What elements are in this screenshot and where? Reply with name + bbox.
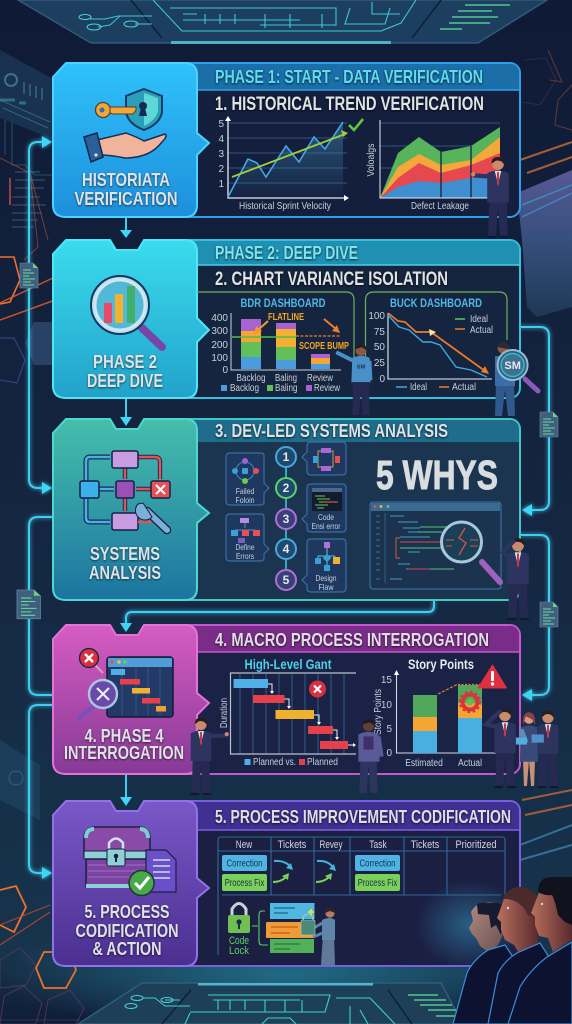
line chart: historical sprint velocity: 4 <box>218 134 224 145</box>
kanban table <box>218 837 505 955</box>
kanban table: Tickets <box>278 839 307 851</box>
icon: locked chest with document <box>84 827 176 896</box>
chart: buck dashboard: 100 <box>368 311 385 322</box>
panel: phase 2 <box>53 240 538 416</box>
kanban table: Prioritized <box>456 839 496 851</box>
chart: buck dashboard: Ideal <box>410 382 427 393</box>
tile label <box>89 544 161 583</box>
five whys chain <box>276 447 296 590</box>
bottom circuit panel <box>78 983 463 1024</box>
gantt chart: High-Level Gant <box>244 656 332 672</box>
kanban table: Correction <box>360 858 396 870</box>
card: code ensi error: Code <box>318 512 334 522</box>
scrum master figure pointing <box>338 344 371 415</box>
tile: phase 4 interrogation <box>53 625 209 774</box>
chart: buck dashboard <box>366 292 507 393</box>
flow arrow 2 to 3 <box>120 398 132 426</box>
area chart: defect leakage: Voloalgs <box>366 144 377 176</box>
line chart: historical sprint velocity: 5 <box>218 119 224 130</box>
card: define errors: Define <box>236 542 255 552</box>
line chart: historical sprint velocity: 1 <box>218 179 224 190</box>
icon: document right lower <box>540 602 558 627</box>
kanban table: Process Fix <box>358 878 397 889</box>
tile label: VERIFICATION <box>74 189 178 209</box>
chart: buck dashboard: 50 <box>374 342 385 353</box>
chart: story points: 15 <box>381 675 392 686</box>
area chart: defect leakage: Defect Leakage <box>411 201 469 212</box>
line chart: historical sprint velocity: 3 <box>218 149 224 160</box>
tile: phase 2 deep dive <box>53 240 209 398</box>
icon: system flow diagram with wrench <box>80 451 170 530</box>
tile label: SYSTEMS <box>90 544 160 564</box>
feedback connector lines <box>29 136 549 879</box>
thinking figure <box>503 538 530 620</box>
panel: phase 3 <box>53 419 530 620</box>
icon: key, shield and hand <box>84 89 166 162</box>
tile label: CODIFICATION <box>76 921 178 941</box>
card: loop diagram <box>302 442 346 475</box>
card: code ensi error <box>302 484 346 532</box>
chart: story points: 0 <box>386 748 392 759</box>
code lock: Code <box>229 935 249 947</box>
chart: bdr dashboard <box>197 292 354 394</box>
tile label <box>74 170 178 209</box>
chart: bdr dashboard: Baling <box>275 373 297 384</box>
chart: buck dashboard: 25 <box>374 358 385 369</box>
gantt chart: Planned vs. <box>253 757 296 768</box>
tile label: 4. PHASE 4 <box>84 726 164 746</box>
card: design flaw <box>302 539 346 592</box>
chart: story points: Story Points <box>408 656 474 672</box>
chart: bdr dashboard: 400 <box>211 313 228 324</box>
tile label <box>64 726 184 763</box>
tile label: 5. PROCESS <box>84 902 170 922</box>
flow arrow 4 to 5 <box>120 774 132 806</box>
area chart: defect leakage <box>366 120 500 212</box>
tile label <box>87 352 163 391</box>
chart: bdr dashboard: Review <box>314 383 341 394</box>
line chart: historical sprint velocity <box>218 116 363 212</box>
presenter figure <box>471 157 510 238</box>
card: failed foloin <box>226 453 269 505</box>
chart: story points <box>373 656 506 769</box>
chart: story points: Story Points <box>373 689 384 735</box>
code cards <box>266 903 314 953</box>
card: define errors: Errors <box>236 551 254 561</box>
icon: document left lower <box>17 590 40 619</box>
chart: bdr dashboard: BDR DASHBOARD <box>240 296 326 310</box>
line chart: historical sprint velocity: 2 <box>218 164 224 175</box>
code lock: Lock <box>229 945 249 957</box>
card: failed foloin: Foloin <box>236 495 255 505</box>
tile label <box>76 902 178 959</box>
figure: woman with tablet <box>516 712 538 786</box>
figure: presenter left <box>190 718 229 795</box>
chart: story points: Actual <box>458 758 482 769</box>
code lock <box>228 904 268 957</box>
chart: bdr dashboard: 300 <box>211 326 228 337</box>
chart: buck dashboard: BUCK DASHBOARD <box>390 296 482 310</box>
kanban table: New <box>236 839 252 851</box>
chart: buck dashboard: Actual <box>470 325 493 336</box>
chart: buck dashboard: Actual <box>452 382 476 393</box>
chart: buck dashboard: 75 <box>374 327 385 338</box>
top circuit panel <box>18 0 547 44</box>
three watching executives <box>453 877 572 1024</box>
panel: phase 1 <box>53 63 520 238</box>
chart: bdr dashboard: 200 <box>211 340 228 351</box>
phase 2 header: PHASE 2: DEEP DIVE <box>215 243 358 263</box>
chart: bdr dashboard: FLATLINE <box>268 312 304 323</box>
icon: gantt window with magnifier <box>79 648 173 718</box>
code window with magnifier <box>370 502 501 589</box>
icon: document right upper <box>540 412 558 437</box>
five whys chain: 2 <box>283 481 290 495</box>
tile label: PHASE 2 <box>93 352 157 372</box>
card: code ensi error: Ensi error <box>312 521 341 531</box>
heading: chart variance isolation: 2. CHART VARIANCE ISOLATION <box>215 269 448 290</box>
phase 1 header: PHASE 1: START - DATA VERIFICATION <box>215 67 483 87</box>
tile label: HISTORIATA <box>82 170 170 190</box>
five whys chain: 5 <box>283 573 290 587</box>
chart: story points: 5 <box>386 724 392 735</box>
heading: historical trend verification: 1. HISTORICAL TREND VERIFICATION <box>215 94 484 115</box>
icon: document left upper <box>20 263 38 288</box>
chart: buck dashboard: 0 <box>379 374 385 385</box>
tile: process codification <box>53 801 209 966</box>
card: design flaw: Design <box>316 573 337 583</box>
tile label: INTERROGATION <box>64 743 184 763</box>
tile: systems analysis <box>53 419 209 600</box>
chart: bdr dashboard: 100 <box>211 353 228 364</box>
kanban table: Tickets <box>411 839 440 851</box>
gantt chart <box>219 656 356 768</box>
heading: 5 whys: 5 WHYS <box>376 452 498 498</box>
chart: story points: 10 <box>381 700 392 711</box>
panel: phase 5 <box>53 801 525 970</box>
card: design flaw: Flaw <box>318 582 334 592</box>
five whys chain: 4 <box>283 542 290 556</box>
heading: macro process interrogation: 4. MACRO PROCESS INTERROGATION <box>215 629 489 650</box>
kanban table: Process Fix <box>225 878 264 889</box>
tile label: DEEP DIVE <box>87 371 163 391</box>
five whys chain: 3 <box>283 512 290 526</box>
chart: bdr dashboard: 0 <box>222 365 228 376</box>
icon: magnifier over bars <box>91 276 162 347</box>
panel: phase 4 <box>53 625 559 795</box>
flow arrow 1 to 2 <box>120 217 132 238</box>
flow arrow 3 to 4 <box>120 623 132 632</box>
tile: historical data verification <box>53 63 209 217</box>
tile label: & ACTION <box>92 939 162 959</box>
figure: manager hand on head <box>486 708 517 788</box>
tile label: ANALYSIS <box>89 563 161 583</box>
scrum master figure pointing: SM <box>357 365 366 371</box>
figure: developer locking cards <box>301 908 335 965</box>
heading: dev-led systems analysis: 3. DEV-LED SYSTEMS ANALYSIS <box>215 421 448 441</box>
card: define errors <box>226 514 269 561</box>
figure: presenter centre <box>358 719 382 793</box>
kanban table: Revey <box>320 839 343 851</box>
five whys chain: 1 <box>283 450 290 464</box>
gantt chart: Planned <box>307 757 338 768</box>
kanban table: Correction <box>226 858 262 870</box>
chart: buck dashboard: Ideal <box>470 314 488 325</box>
card: failed foloin: Failed <box>236 486 255 496</box>
scrum master figure with magnifier <box>495 342 538 416</box>
chart: bdr dashboard: SCOPE BUMP <box>299 341 349 352</box>
kanban table: Task <box>369 839 387 851</box>
chart: bdr dashboard: Backlog <box>230 383 259 394</box>
chart: bdr dashboard: Backlog <box>236 373 266 384</box>
chart: story points: Estimated <box>405 758 443 769</box>
figure: man with clipboard <box>532 711 559 788</box>
gantt chart: Duration <box>219 698 230 728</box>
scrum master figure with magnifier: SM <box>504 360 521 372</box>
chart: bdr dashboard: Review <box>307 373 334 384</box>
line chart: historical sprint velocity: Historical Sprint Velocity <box>239 201 331 212</box>
chart: bdr dashboard: Baling <box>275 383 298 394</box>
